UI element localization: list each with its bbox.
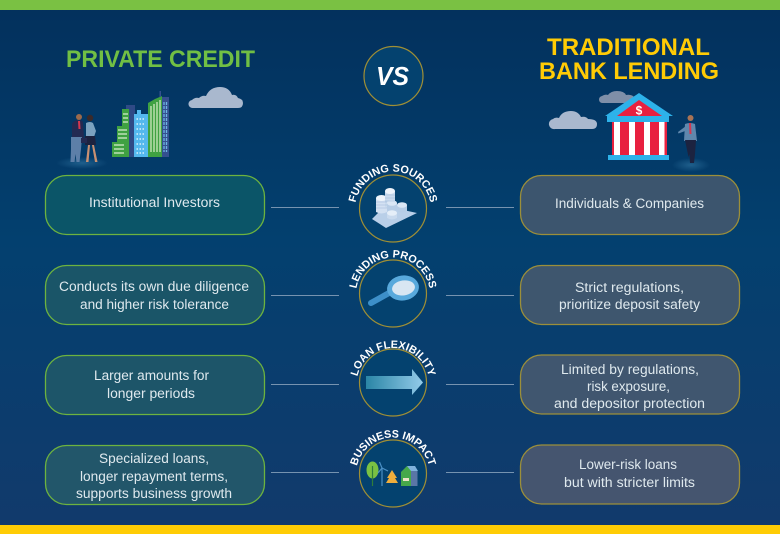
panel: limited by regulations: and depositor protection bbox=[554, 396, 705, 411]
panel: institutional investors: Institutional Investors bbox=[89, 195, 220, 210]
panel: strict regulations bbox=[520, 266, 740, 324]
bottom yellow bar bbox=[0, 525, 780, 534]
panel: specialized loans bbox=[46, 446, 264, 504]
panel: limited by regulations bbox=[520, 355, 740, 414]
heading: traditional bank lending: TRADITIONAL bbox=[547, 34, 710, 61]
label: lending process: LENDING PROCESS bbox=[349, 250, 436, 288]
icon: bank building: $ bbox=[636, 104, 643, 118]
connector left bbox=[271, 472, 339, 474]
row 2: lending process bbox=[44, 250, 740, 328]
panel: larger amounts: longer periods bbox=[107, 386, 195, 401]
panel: limited by regulations: risk exposure, bbox=[587, 379, 670, 394]
panel: due diligence: Conducts its own due diligence bbox=[59, 279, 249, 294]
panel: institutional investors bbox=[46, 176, 264, 234]
icon: arrow bbox=[360, 349, 426, 416]
icon: city buildings bbox=[112, 91, 169, 157]
connector left bbox=[271, 294, 339, 296]
panel: lower-risk loans: Lower-risk loans bbox=[579, 457, 677, 472]
connector left bbox=[271, 206, 339, 208]
panel: specialized loans: Specialized loans, bbox=[99, 451, 209, 466]
row 3: loan flexibility bbox=[44, 340, 740, 417]
panel: lower-risk loans bbox=[520, 445, 740, 504]
icon: business people bbox=[56, 114, 108, 169]
connector right bbox=[446, 472, 514, 474]
panel: lower-risk loans: but with stricter limits bbox=[564, 475, 695, 490]
label: loan flexibility: LOAN FLEXIBILITY bbox=[350, 340, 436, 376]
label: funding sources: FUNDING SOURCES bbox=[348, 164, 438, 202]
illustration: business people and city bbox=[56, 87, 243, 169]
row 1: funding sources bbox=[44, 164, 740, 243]
panel: due diligence: and higher risk tolerance bbox=[80, 297, 229, 312]
icon: cloud bbox=[188, 87, 243, 108]
panel: individuals and companies: Individuals & Companies bbox=[555, 196, 704, 211]
panel: larger amounts bbox=[46, 356, 264, 414]
panel: specialized loans: supports business growth bbox=[76, 486, 232, 501]
panel: larger amounts: Larger amounts for bbox=[94, 368, 210, 383]
vs badge bbox=[364, 46, 423, 106]
heading: private credit: PRIVATE CREDIT bbox=[66, 46, 255, 73]
icon: banker figure bbox=[672, 115, 710, 172]
panel: limited by regulations: Limited by regulations, bbox=[561, 362, 699, 377]
vs badge: VS bbox=[376, 61, 410, 91]
icon: left cloud bbox=[549, 111, 597, 129]
panel: strict regulations: prioritize deposit safety bbox=[559, 297, 700, 312]
connector right bbox=[446, 384, 514, 386]
heading: traditional bank lending: BANK LENDING bbox=[539, 58, 719, 85]
connector right bbox=[446, 294, 514, 296]
heading: traditional bank lending bbox=[539, 34, 719, 85]
panel: due diligence bbox=[46, 266, 264, 324]
illustration: bank and banker bbox=[549, 91, 710, 172]
icon: funding sources coins bbox=[360, 175, 426, 242]
panel: individuals and companies bbox=[520, 176, 740, 234]
panel: specialized loans: longer repayment terms, bbox=[80, 469, 228, 484]
panel: strict regulations: Strict regulations, bbox=[575, 280, 684, 295]
row 4: business impact bbox=[44, 430, 740, 508]
connector left bbox=[271, 384, 339, 386]
icon: tree, turbine and house bbox=[360, 440, 426, 507]
connector right bbox=[446, 206, 514, 208]
top green bar bbox=[0, 0, 780, 10]
icon: bank building bbox=[605, 93, 673, 160]
icon: back cloud bbox=[599, 91, 635, 103]
icon: magnifying glass bbox=[360, 260, 426, 327]
label: business impact: BUSINESS IMPACT bbox=[350, 430, 436, 466]
